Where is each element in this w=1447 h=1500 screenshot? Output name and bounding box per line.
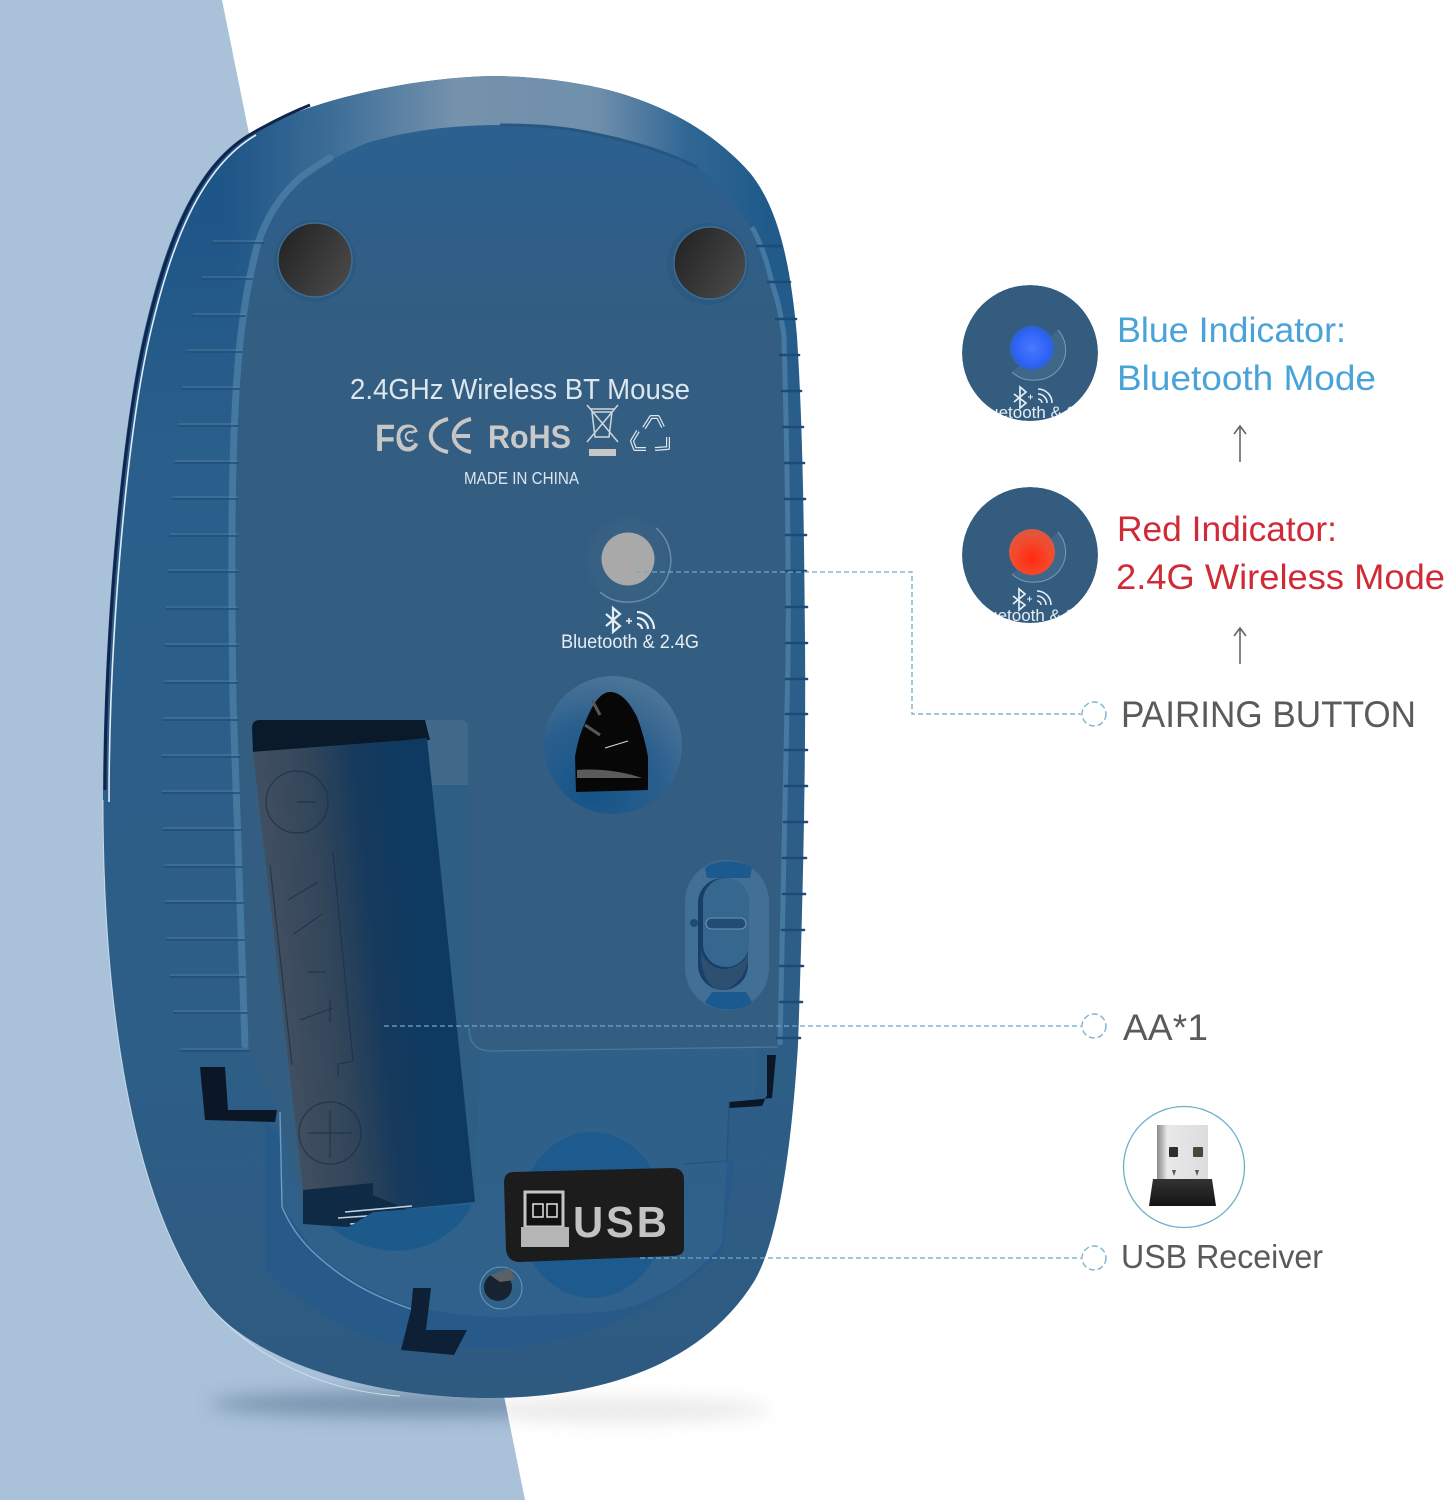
compartment dark gap: [252, 720, 430, 752]
blue indicator icon: [962, 285, 1103, 422]
made in china text: MADE IN CHINA: [464, 468, 579, 488]
left step highlight: [280, 1112, 411, 1309]
battery compartment: [252, 720, 480, 1227]
mouse body shell: [103, 76, 805, 1398]
battery marks: [266, 771, 361, 1164]
right slot: [729, 1055, 776, 1108]
pairing button: [587, 518, 671, 602]
USB lettering: USB: [573, 1198, 670, 1247]
power switch: [685, 860, 769, 1010]
red indicator icon: Bluetooth & 2.4G: [973, 606, 1102, 625]
rim ribs right: [757, 246, 807, 1038]
USB receiver badge: [504, 1168, 684, 1262]
well below battery: [330, 1204, 472, 1251]
base plate: [237, 125, 787, 1317]
lower tray band: [265, 1120, 735, 1348]
RoHS mark: RoHS: [488, 419, 571, 455]
product label text: 2.4GHz Wireless BT Mouse: [350, 374, 690, 406]
blue indicator icon: Bluetooth & 2.4G: [974, 403, 1103, 422]
background: pale blue angled panel: [0, 0, 525, 1500]
optical sensor well: [544, 676, 682, 814]
blue indicator label: Blue Indicator:: [1117, 311, 1346, 350]
right lip highlight: [752, 227, 788, 1045]
callout marker: pairing: [1082, 702, 1106, 726]
leader line: battery: [384, 1025, 1081, 1027]
bottom slot: [401, 1288, 467, 1355]
arrow: red to blue: [1234, 426, 1246, 462]
icon: recycle symbol: [632, 417, 668, 449]
icon: bluetooth plus wireless: [606, 608, 654, 632]
callout marker: usb: [1082, 1246, 1106, 1270]
leader line: usb receiver: [640, 1257, 1081, 1259]
shadow below top highlight: [500, 125, 697, 167]
lower plate step: [278, 1048, 778, 1317]
screw hole: [480, 1267, 522, 1309]
door panel edge: [469, 1028, 778, 1051]
red indicator label: 2.4G Wireless Mode: [1116, 558, 1445, 597]
dark outer edge: [105, 105, 310, 790]
blue indicator label: Bluetooth Mode: [1117, 359, 1376, 398]
thin white edge: [109, 135, 256, 802]
icon: usb dongle: [1124, 1106, 1244, 1228]
pairing button label: PAIRING BUTTON: [1121, 694, 1416, 735]
FCC mark: FC: [375, 418, 419, 460]
usb receiver label: USB Receiver: [1121, 1238, 1323, 1275]
mouse underside: [90, 50, 820, 1398]
aa battery: [253, 738, 475, 1212]
lower white edge: [103, 800, 400, 1396]
red indicator icon: [962, 487, 1102, 625]
icon: WEEE crossed bin: [587, 405, 618, 456]
leader line: pairing button: [636, 572, 1081, 714]
left lip highlight: [232, 158, 330, 1045]
callout marker: battery: [1082, 1014, 1106, 1038]
highlight on top rim: [133, 76, 800, 402]
red indicator label: Red Indicator:: [1117, 510, 1337, 549]
clipped body detail: [90, 50, 820, 1348]
CE mark: [431, 419, 471, 452]
rim ribs left: [162, 243, 264, 1051]
left slot: [200, 1067, 277, 1122]
floor shadow on blue side: [210, 1392, 650, 1416]
battery label: AA*1: [1123, 1007, 1208, 1048]
bluetooth and 2.4G label: Bluetooth & 2.4G: [561, 632, 699, 653]
ribs highlights left: [162, 241, 264, 1049]
blue indicator label: [1117, 311, 1376, 398]
right step edge: [683, 1102, 729, 1164]
rubber foot right: [667, 223, 749, 305]
icon: usb receiver: [521, 1192, 569, 1247]
rubber foot left: [274, 220, 356, 302]
USB well: [520, 1132, 664, 1298]
compartment right wall: [425, 720, 480, 1202]
floor shadow on white side: [470, 1398, 770, 1422]
arrow: pairing to red: [1234, 628, 1246, 664]
red indicator label: [1116, 510, 1445, 597]
